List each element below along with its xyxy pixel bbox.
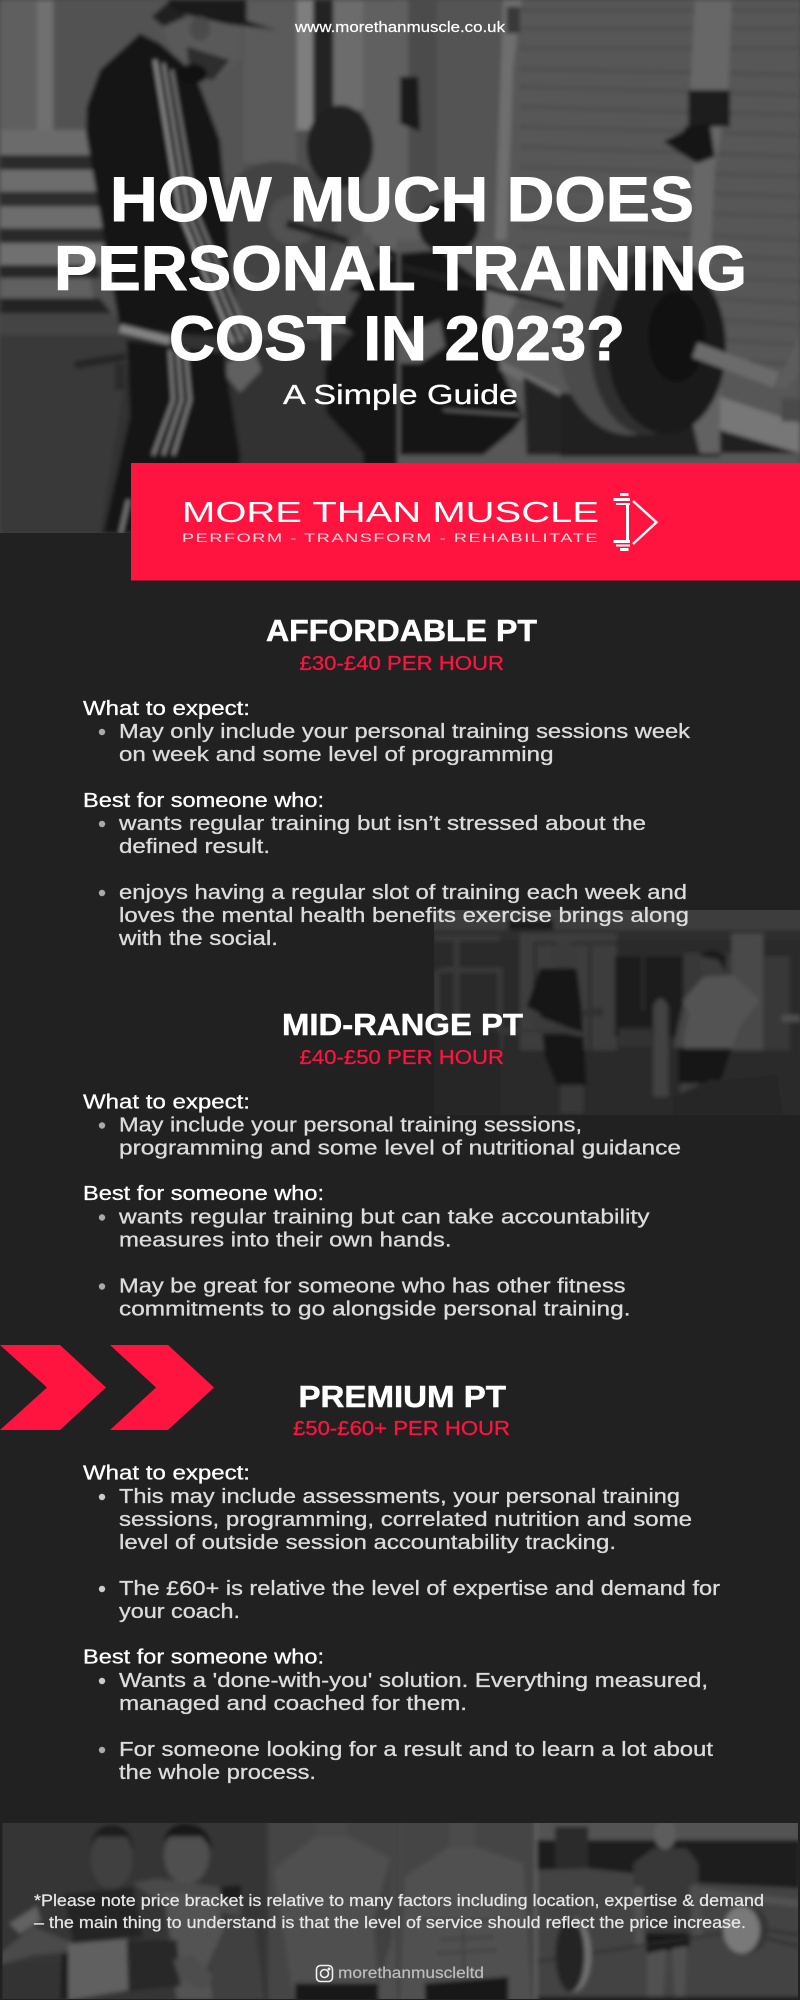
- best for: Best for someone who:: [83, 1183, 324, 1205]
- lines overlapping the mid-range photo: with the social.: [118, 928, 278, 950]
- heading: MID-RANGE PT: [282, 1007, 523, 1042]
- website url: www.morethanmuscle.co.uk: [294, 20, 506, 36]
- right half of the photo, drawn in 3x units: [394, 0, 800, 463]
- what to expect: [83, 1462, 720, 1623]
- footer photo strip: client results: [0, 1813, 800, 2000]
- what to expect: on week and some level of programming: [119, 744, 554, 766]
- price: £50-£60+ PER HOUR: [293, 1418, 510, 1440]
- logo wordmark: MORE THAN MUSCLE: [182, 497, 599, 529]
- best for: [83, 1646, 714, 1784]
- best for: managed and coached for them.: [119, 1693, 467, 1715]
- heading: AFFORDABLE PT: [266, 613, 537, 648]
- what to expect: The £60+ is relative the level of expertise and demand for: [119, 1578, 720, 1600]
- best for: commitments to go alongside personal training.: [119, 1298, 630, 1320]
- logo tagline: PERFORM - TRANSFORM - REHABILITATE: [182, 532, 599, 545]
- footnote about price brackets: [34, 1892, 764, 1932]
- best for: the whole process.: [119, 1762, 316, 1784]
- section: mid-range PT: [83, 1007, 681, 1320]
- what to expect: sessions, programming, correlated nutrition and some: [119, 1509, 692, 1531]
- price: £40-£50 PER HOUR: [300, 1047, 504, 1069]
- section: affordable PT: [83, 613, 691, 904]
- title: PERSONAL TRAINING: [54, 234, 747, 304]
- best for: enjoys having a regular slot of training each week and: [119, 882, 687, 904]
- footnote about price brackets: – the main thing to understand is that the level of service should reflect the price increase.: [34, 1914, 746, 1932]
- title: HOW MUCH DOES: [110, 165, 694, 235]
- left half of the strip, drawn in 3x units: [2, 1823, 396, 1999]
- best for: [83, 1183, 650, 1320]
- best for: wants regular training but isn’t stressed about the: [118, 813, 646, 835]
- title: [54, 165, 747, 374]
- left half of the photo, drawn in 3x units: [0, 0, 400, 535]
- what to expect: May include your personal training sessions,: [119, 1114, 582, 1136]
- what to expect: [83, 698, 691, 766]
- subtitle: A Simple Guide: [283, 379, 518, 410]
- best for: wants regular training but can take accountability: [118, 1206, 649, 1228]
- what to expect: your coach.: [119, 1601, 240, 1623]
- best for: Best for someone who:: [83, 790, 324, 812]
- what to expect: What to expect:: [83, 698, 250, 720]
- mid-range background photo: coach and client talking in gym: [430, 907, 800, 1118]
- title: COST IN 2023?: [169, 304, 625, 374]
- best for: Best for someone who:: [83, 1646, 324, 1668]
- icon: instagram: [316, 1966, 332, 1982]
- what to expect: level of outside session accountability tracking.: [119, 1532, 616, 1554]
- best for: measures into their own hands.: [119, 1230, 452, 1252]
- what to expect: May only include your personal training sessions week: [119, 721, 691, 743]
- best for: defined result.: [119, 836, 270, 858]
- price: £30-£40 PER HOUR: [300, 653, 504, 675]
- section: premium PT: [83, 1379, 720, 1784]
- what to expect: This may include assessments, your personal training: [119, 1486, 680, 1508]
- best for: [83, 790, 687, 904]
- what to expect: What to expect:: [83, 1462, 250, 1484]
- footnote about price brackets: *Please note price bracket is relative to many factors including location, expertise & demand: [34, 1892, 764, 1910]
- best for: For someone looking for a result and to learn a lot about: [119, 1739, 714, 1761]
- right half of the strip, drawn in 3x units: [397, 1813, 800, 2000]
- what to expect: programming and some level of nutritional guidance: [119, 1138, 681, 1160]
- icon: red double chevron arrows: [0, 1345, 214, 1430]
- hero photo: coach spotting a barbell squat: [0, 0, 800, 535]
- lines overlapping the mid-range photo: [118, 905, 689, 950]
- lines overlapping the mid-range photo: loves the mental health benefits exercise brings along: [119, 905, 689, 927]
- red logo banner: [131, 463, 800, 580]
- best for: Wants a 'done-with-you' solution. Everything measured,: [119, 1670, 708, 1692]
- what to expect: What to expect:: [83, 1092, 250, 1114]
- best for: May be great for someone who has other fitness: [119, 1276, 626, 1298]
- heading: PREMIUM PT: [298, 1379, 506, 1414]
- what to expect: [83, 1092, 681, 1160]
- icon: barbell and chevron logo mark: [614, 493, 656, 551]
- instagram handle: morethanmuscleltd: [338, 1965, 484, 1982]
